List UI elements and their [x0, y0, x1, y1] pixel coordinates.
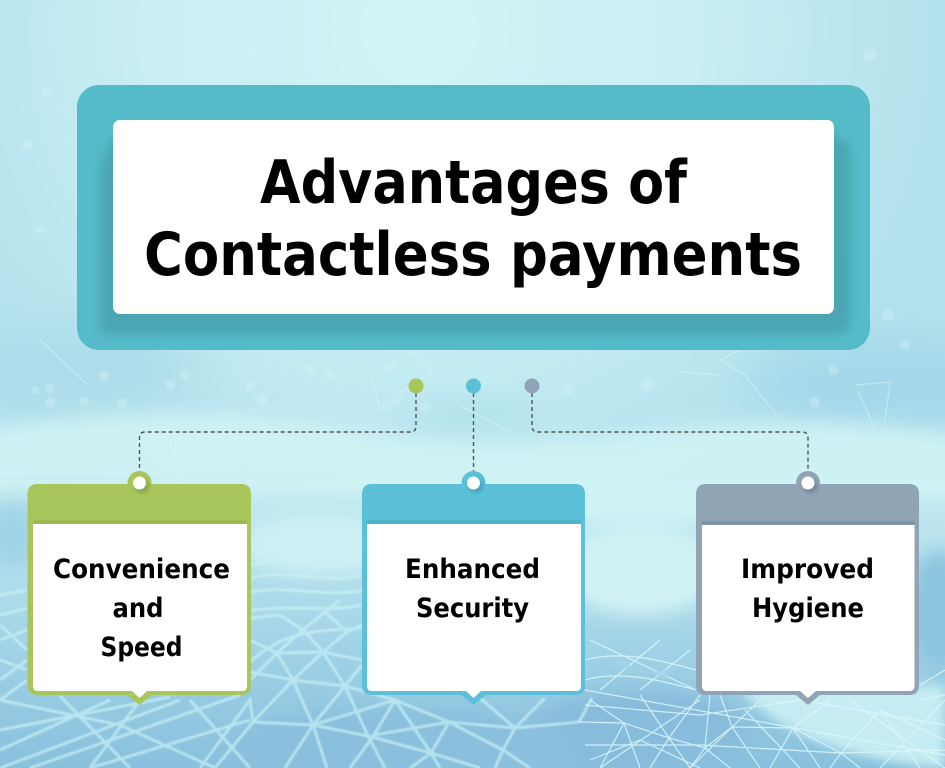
knob [133, 476, 149, 493]
hazy blue diamonds [585, 625, 675, 680]
card frame with pointer [28, 484, 251, 705]
card: Enhanced Security [362, 471, 585, 705]
card: Convenience and Speed [28, 471, 251, 705]
panel inner long shadow [101, 135, 850, 334]
faint particles [22, 45, 910, 413]
title text: Advantages of [260, 148, 688, 218]
knob [802, 476, 818, 493]
fine mesh [579, 640, 945, 768]
card label [405, 554, 540, 624]
card label: Enhanced [405, 554, 540, 585]
title text [144, 148, 802, 290]
card label: Convenience [53, 554, 230, 585]
card body [33, 524, 247, 698]
card: Improved Hygiene [696, 471, 919, 705]
card label: Improved [741, 554, 874, 585]
card label: Hygiene [752, 593, 864, 624]
card frame with pointer [362, 484, 585, 705]
panel frame [77, 85, 870, 350]
card body [367, 524, 581, 698]
white title card [113, 120, 834, 314]
card label [53, 554, 230, 663]
light wave band [0, 415, 945, 525]
connector: green dot to Convenience card [140, 378, 424, 474]
card frame with pointer [696, 484, 919, 705]
card label: and [112, 593, 164, 624]
knob [467, 476, 483, 493]
card label: Security [416, 593, 529, 624]
card label [741, 554, 874, 624]
connector: blue dot to Security card [466, 378, 481, 474]
title text: Contactless payments [144, 220, 802, 290]
faint network lines [40, 340, 890, 570]
title panel [77, 85, 870, 350]
card body [702, 525, 914, 698]
card label: Speed [100, 632, 182, 663]
connector: grey dot to Hygiene card [524, 378, 808, 474]
wide soft mesh [0, 561, 592, 768]
